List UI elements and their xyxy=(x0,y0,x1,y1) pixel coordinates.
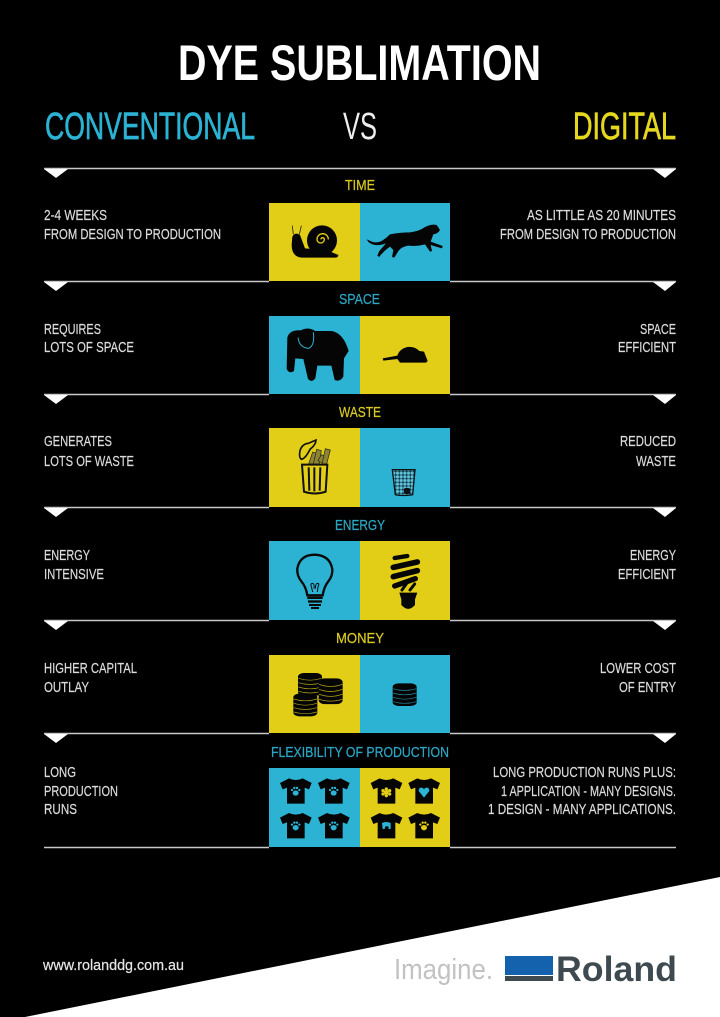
icon: identical t-shirts xyxy=(280,778,350,838)
digital text: money: OF ENTRY xyxy=(619,680,676,696)
conventional text: flexibility: PRODUCTION xyxy=(44,784,118,800)
conventional text: time: FROM DESIGN TO PRODUCTION xyxy=(44,227,221,243)
label: space: SPACE xyxy=(339,291,380,308)
digital text: waste: REDUCED xyxy=(620,434,676,450)
panel: flexibility colour blocks xyxy=(269,768,450,847)
panel: time colour blocks xyxy=(269,203,450,281)
icon: elephant xyxy=(287,328,349,381)
logo: roland xyxy=(505,950,677,989)
row: time xyxy=(44,168,676,281)
panel: energy colour blocks xyxy=(269,541,450,620)
digital text: space: EFFICIENT xyxy=(618,340,676,356)
digital text: time xyxy=(500,208,676,243)
row: space xyxy=(44,282,676,394)
icon: small bin xyxy=(392,470,415,495)
white footer wedge xyxy=(25,877,720,1017)
conventional text: energy xyxy=(44,548,104,583)
label: time: TIME xyxy=(345,177,375,194)
label: energy: ENERGY xyxy=(335,517,385,534)
digital text: energy: EFFICIENT xyxy=(618,567,676,583)
conventional text: money: HIGHER CAPITAL xyxy=(44,661,137,677)
conventional text: money: OUTLAY xyxy=(44,680,89,696)
digital text: flexibility: LONG PRODUCTION RUNS PLUS: xyxy=(493,765,676,781)
logo: roland: Roland xyxy=(556,950,677,989)
icon: full bin xyxy=(300,440,330,493)
panel: waste colour blocks xyxy=(269,428,450,507)
heading: vs: VS xyxy=(343,106,377,148)
digital text: energy: ENERGY xyxy=(630,548,676,564)
row: waste xyxy=(44,394,676,507)
digital text: energy xyxy=(618,548,676,583)
digital text: flexibility: 1 DESIGN - MANY APPLICATIONS. xyxy=(488,802,676,818)
conventional text: time xyxy=(44,208,221,243)
icon: snail xyxy=(292,225,338,258)
conventional text: energy: ENERGY xyxy=(44,548,90,564)
icon: energy saving bulb xyxy=(393,556,417,609)
icon: mouse xyxy=(383,347,428,363)
row: energy xyxy=(44,508,676,620)
label: waste: WASTE xyxy=(339,404,381,421)
digital text: waste: WASTE xyxy=(636,454,676,470)
conventional text: waste xyxy=(44,434,134,470)
digital text: waste xyxy=(620,434,676,470)
conventional text: money xyxy=(44,661,137,696)
digital text: money: LOWER COST xyxy=(600,661,676,677)
conventional text: flexibility xyxy=(44,765,118,818)
heading: digital: DIGITAL xyxy=(573,106,676,148)
icon: incandescent bulb xyxy=(297,555,332,609)
conventional text: time: 2-4 WEEKS xyxy=(44,208,107,224)
conventional text: space xyxy=(44,322,134,356)
digital text: space xyxy=(618,322,676,356)
icon: coin stacks xyxy=(293,673,343,716)
row: flexibility of production xyxy=(44,734,676,848)
digital text: space: SPACE xyxy=(640,322,676,338)
digital text: flexibility xyxy=(488,765,676,818)
digital text: money xyxy=(600,661,676,696)
panel: money colour blocks xyxy=(269,655,450,733)
conventional text: flexibility: RUNS xyxy=(44,802,77,818)
digital text: time: AS LITTLE AS 20 MINUTES xyxy=(527,208,676,224)
label: money: MONEY xyxy=(336,630,384,647)
icon: single coin stack xyxy=(393,683,417,706)
conventional text: waste: GENERATES xyxy=(44,434,112,450)
panel: space colour blocks xyxy=(269,316,450,394)
tagline: imagine: Imagine. xyxy=(394,954,493,986)
conventional text: energy: INTENSIVE xyxy=(44,567,104,583)
icon: varied t-shirts xyxy=(371,778,440,838)
conventional text: waste: LOTS OF WASTE xyxy=(44,454,134,470)
title: DYE SUBLIMATION xyxy=(178,35,541,91)
icon: cheetah xyxy=(367,225,443,258)
conventional text: space: REQUIRES xyxy=(44,322,101,338)
row: money xyxy=(44,620,676,733)
heading: conventional: CONVENTIONAL xyxy=(45,106,255,148)
conventional text: flexibility: LONG xyxy=(44,765,76,781)
label: flexibility of production: FLEXIBILITY OF PRODUCTION xyxy=(271,744,449,761)
conventional text: space: LOTS OF SPACE xyxy=(44,340,134,356)
website url: www.rolanddg.com.au xyxy=(42,958,184,974)
